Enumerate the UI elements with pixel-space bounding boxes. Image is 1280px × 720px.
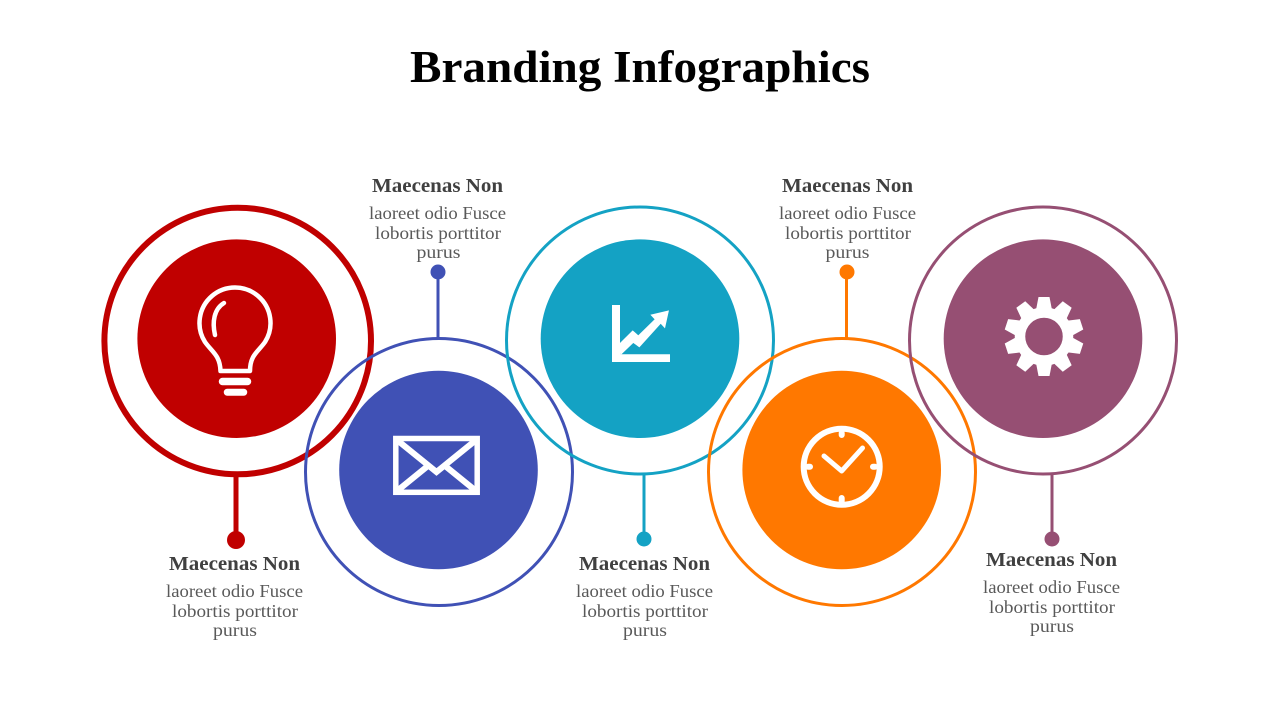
label: step 4: laoreet odio Fusce (779, 203, 916, 223)
connector: teal (636, 473, 652, 546)
ring: purple (910, 207, 1176, 474)
label: step 5: lobortis porttitor (989, 597, 1115, 617)
label: step 3: laoreet odio Fusce (576, 581, 713, 601)
connector: red (227, 474, 245, 549)
connector: blue (430, 264, 446, 339)
step 5: purple gear (910, 207, 1176, 636)
label: step 1: lobortis porttitor (172, 601, 298, 621)
icon: lightbulb (200, 288, 270, 394)
label: step 4: Maecenas Non (782, 175, 913, 197)
label: step 2: purus (416, 242, 460, 262)
disc: orange (742, 371, 941, 569)
ring: blue (306, 338, 572, 606)
connector: orange (840, 264, 854, 339)
label: step 3: Maecenas Non (579, 553, 710, 575)
icon: clock (804, 429, 880, 505)
title: Branding Infographics (410, 42, 870, 92)
label: step 2: laoreet odio Fusce (369, 203, 506, 223)
icon: growth chart (612, 305, 670, 362)
disc: purple (944, 239, 1142, 438)
label: step 5: Maecenas Non (986, 549, 1117, 571)
step 4: orange clock (708, 175, 976, 606)
label: step 4 (779, 175, 916, 262)
disc: teal (541, 239, 739, 438)
disc: blue (339, 371, 538, 569)
label: step 2: Maecenas Non (372, 175, 503, 197)
label: step 5: purus (1030, 616, 1074, 636)
ring: orange (708, 338, 976, 606)
ring: teal (506, 207, 774, 474)
label: step 5: laoreet odio Fusce (983, 577, 1120, 597)
label: step 4: purus (826, 242, 870, 262)
label: step 2: lobortis porttitor (375, 223, 501, 243)
label: step 5 (983, 549, 1120, 636)
ring: red (104, 208, 371, 474)
label: step 2 (369, 175, 506, 262)
label: step 3: purus (623, 620, 667, 640)
disc: red (137, 239, 336, 438)
label: step 3 (576, 553, 713, 640)
label: step 1 (166, 553, 303, 640)
label: step 1: purus (213, 620, 257, 640)
icon: gear (1004, 297, 1084, 376)
label: step 1: Maecenas Non (169, 553, 300, 575)
step 3: teal chart (506, 207, 774, 640)
label: step 3: lobortis porttitor (582, 601, 708, 621)
label: step 1: laoreet odio Fusce (166, 581, 303, 601)
step 2: blue envelope (306, 175, 572, 606)
label: step 4: lobortis porttitor (785, 223, 911, 243)
step 1: red lightbulb (104, 208, 371, 640)
icon: envelope (396, 438, 477, 492)
connector: purple (1044, 473, 1060, 546)
